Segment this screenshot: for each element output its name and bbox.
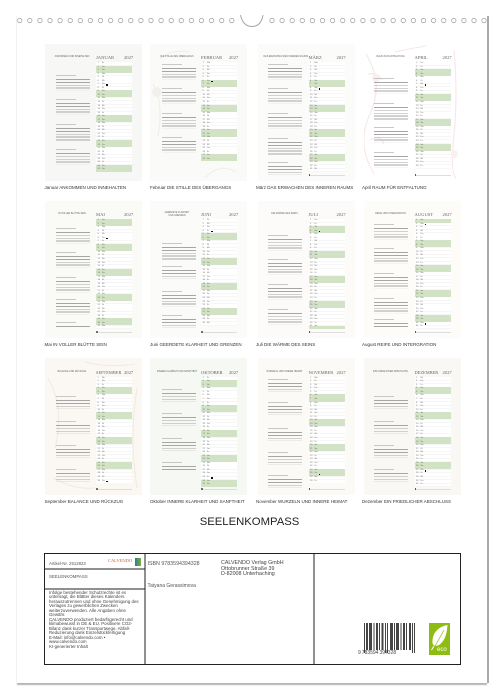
calendar grid: Di Mi Do Fr Sa So Mo Di Mi Do Fr Sa So Mo Di Mi Do Fr Sa So Mo Di Mi Do Fr Sa So Mo Di Mi [207, 219, 210, 324]
calendar grid: Mi Do Fr Sa So Mo Di Mi Do Fr Sa So Mo Di Mi Do Fr Sa So Mo Di Mi Do Fr Sa So Mo Di Mi Do [102, 377, 105, 482]
year: 2027 [229, 55, 238, 60]
calendar grid: Do Fr Sa So Mo Di Mi Do Fr Sa So Mo Di Mi Do Fr Sa So Mo Di Mi Do Fr Sa So Mo Di Mi Do Fr [420, 62, 424, 167]
legal notice: weiterzuverwenden. Alle Angaben ohne [49, 608, 126, 613]
product name: SEELENKOMPASS [49, 574, 88, 579]
heading: Mai: IN VOLLER BLÜTTE SEIN [58, 213, 86, 215]
eco label: eco [437, 647, 447, 653]
calendar grid: Mo Di Mi Do Fr Sa So Mo Di Mi Do Fr Sa So Mo Di Mi Do Fr Sa So Mo Di Mi Do Fr Sa So [207, 62, 210, 160]
heading: November: WURZELN UND INNERE HEIMAT [267, 371, 302, 373]
month name: JUNI [201, 212, 211, 217]
text blocks [268, 379, 302, 488]
year: 2027 [442, 212, 452, 217]
calendar grid [414, 62, 450, 168]
logo wordmark: CALVENDO [108, 558, 132, 563]
panel: März [258, 44, 354, 181]
panel: Juni [150, 201, 247, 338]
calendar grid [96, 377, 132, 483]
panel: Oktober [150, 358, 247, 495]
heading: März: DAS ERWACHEN DES INNEREN RAUMS [264, 56, 308, 58]
legal notice: Infolge bestehender Schutzrechte ist es [49, 590, 126, 595]
imprint table [44, 553, 461, 665]
year: 2027 [442, 370, 452, 374]
spiral binding rings [17, 14, 487, 27]
caption: Dezember: Dezember EIN FRIEDLICHER ABSCHLUSS [362, 499, 451, 504]
legal notice: Gewähr. [49, 612, 65, 617]
calendar grid [308, 219, 344, 329]
text blocks [56, 396, 90, 482]
text blocks [268, 64, 302, 175]
caption: April: April RAUM FÜR ENTFALTUNG [362, 184, 427, 190]
month name: JULI [308, 212, 318, 217]
calendar grid: 1 2 3 4 5 6 7 8 9 10 11 12 13 14 15 16 17 18 19 20 21 22 23 24 25 26 27 28 29 30 31 [416, 377, 418, 485]
legal notice: klimabewusst in DE & EU. Positivere CO2- [49, 621, 132, 626]
caption: Juli: Juli DIE WÄRME DES SEINS [256, 342, 315, 347]
calendar grid: Mo Di Mi Do Fr Sa So Mo Di Mi Do Fr Sa So Mo Di Mi Do Fr Sa So Mo Di Mi Do Fr Sa So Mo Di Mi [314, 62, 318, 170]
calendar grid: 1 2 3 4 5 6 7 8 9 10 11 12 13 14 15 16 17 18 19 20 21 22 23 24 25 26 27 28 [202, 62, 205, 160]
heading: September: BALANCE UND RÜCKZUG [58, 371, 86, 373]
calendar grid: 1 2 3 4 5 6 7 8 9 10 11 12 13 14 15 16 17 18 19 20 21 22 23 24 25 26 27 28 29 30 31 [310, 62, 312, 170]
caption: Mai: Mai IN VOLLER BLÜTTE SEIN [44, 342, 107, 347]
month name: AUGUST [414, 212, 433, 217]
legal notice: Reduzierung dank Einzelstückfertigung [49, 630, 125, 635]
month name: MAI [96, 212, 105, 217]
panel: Juli [258, 201, 354, 338]
calendar grid: Fr Sa So Mo Di Mi Do Fr Sa So Mo Di Mi Do Fr Sa So Mo Di Mi Do Fr Sa So Mo Di Mi Do Fr Sa So [207, 377, 210, 485]
month name: NOVEMBER [308, 370, 333, 374]
year: 2027 [229, 212, 238, 217]
year: 2027 [336, 370, 346, 374]
text blocks [162, 64, 196, 153]
table rules [45, 554, 314, 664]
legal notice: untersagt, die Blätter dieses Kalenders [49, 594, 124, 599]
publisher address [221, 560, 284, 577]
legal notice: CALVENDO produziert bedarfsgerecht und [49, 617, 133, 622]
heading: Dezember: EIN FRIEDLICHER ABSCHLUSS [373, 371, 408, 373]
caption: Juni: Juni GEERDETE KLARHEIT UND GRENZEN [150, 342, 242, 347]
title: SEELENKOMPASS [200, 516, 299, 528]
heading: Februar: DIE STILLE DES ÜBERGANGS [160, 56, 194, 58]
calendar grid: 1 2 3 4 5 6 7 8 9 10 11 12 13 14 15 16 17 18 19 20 21 22 23 24 25 26 27 28 29 30 31 [98, 219, 100, 327]
publisher address: Ottobrunner Straße 39 [221, 566, 274, 572]
text blocks [374, 224, 408, 327]
text blocks [374, 396, 408, 482]
heading: April: RAUM FÜR ENTFALTUNG [376, 56, 405, 58]
month name: JANUAR [96, 55, 114, 60]
month name: FEBRUAR [201, 55, 222, 60]
heading: Juli: DIE WÄRME DES SEINS [271, 213, 298, 215]
panel: Dezember [364, 358, 460, 495]
legal notice: Bilanz dank kurzer Transportwege. Abfall- [49, 626, 130, 631]
legal notice: KI-generierter Inhalt [49, 644, 88, 649]
calendar grid: 1 2 3 4 5 6 7 8 9 10 11 12 13 14 15 16 17 18 19 20 21 22 23 24 25 26 27 28 29 30 31 [202, 377, 205, 485]
barcode [364, 623, 415, 653]
calendar grid [414, 377, 450, 487]
text blocks [162, 243, 196, 328]
calendar grid: 1 2 3 4 5 6 7 8 9 10 11 12 13 14 15 16 17 18 19 20 21 22 23 24 25 26 27 28 29 30 31 [416, 219, 418, 327]
caption: Februar: Februar DIE STILLE DES ÜBERGANGS [150, 184, 231, 190]
month name: SEPTEMBER [96, 370, 121, 374]
calendar grid: Fr Sa So Mo Di Mi Do Fr Sa So Mo Di Mi Do Fr Sa So Mo Di Mi Do Fr Sa So Mo Di Mi Do Fr Sa So [102, 62, 105, 170]
year: 2027 [124, 55, 133, 60]
panel: September [45, 358, 142, 495]
publisher address: CALVENDO Verlag GmbH [221, 560, 284, 566]
year: 2027 [124, 370, 133, 374]
heading: Juni: GEERDETE KLARHEIT [165, 212, 189, 214]
caption: November: November WURZELN UND INNERE HEIMAT [256, 499, 347, 504]
calendar grid [96, 219, 132, 329]
month name: DEZEMBER [414, 370, 438, 374]
calendar grid: 1 2 3 4 5 6 7 8 9 10 11 12 13 14 15 16 17 18 19 20 21 22 23 24 25 26 27 28 29 30 31 [98, 62, 100, 170]
publisher logo [108, 558, 141, 566]
calendar grid [308, 62, 344, 172]
panel: Mai [45, 201, 142, 338]
text blocks [268, 235, 302, 325]
calendar grid [308, 377, 344, 483]
text blocks [162, 389, 196, 470]
calendar grid: Sa So Mo Di Mi Do Fr Sa So Mo Di Mi Do Fr Sa So Mo Di Mi Do Fr Sa So Mo Di Mi Do Fr Sa So Mo [102, 219, 105, 327]
panel: August [364, 201, 460, 338]
calendar grid: 1 2 3 4 5 6 7 8 9 10 11 12 13 14 15 16 17 18 19 20 21 22 23 24 25 26 27 28 29 30 [310, 377, 312, 482]
calendar grid [414, 219, 450, 329]
text blocks [56, 228, 90, 327]
caption: August: August REIFE UND INTERGRATION [362, 342, 436, 347]
calendar grid: So Mo Di Mi Do Fr Sa So Mo Di Mi Do Fr Sa So Mo Di Mi Do Fr Sa So Mo Di Mi Do Fr Sa So Mo Di [420, 219, 424, 327]
calendar grid: Mi Do Fr Sa So Mo Di Mi Do Fr Sa So Mo Di Mi Do Fr Sa So Mo Di Mi Do Fr Sa So Mo Di Mi Do Fr [420, 377, 424, 485]
calendar grid [201, 62, 237, 161]
legal notice: E-Mail: info@calvendo.com • [49, 635, 105, 640]
eco badge [429, 623, 450, 655]
calendar grid: 1 2 3 4 5 6 7 8 9 10 11 12 13 14 15 16 17 18 19 20 21 22 23 24 25 26 27 28 29 30 [98, 377, 100, 482]
year: 2027 [124, 212, 133, 217]
month name: OKTOBER [201, 370, 223, 374]
month name: MÄRZ [308, 55, 322, 60]
heading: Juni [164, 211, 190, 217]
calendar grid [201, 219, 237, 326]
year: 2027 [336, 212, 346, 217]
year: 2027 [336, 55, 346, 60]
leaf icon [431, 625, 448, 650]
calendar grid: Do Fr Sa So Mo Di Mi Do Fr Sa So Mo Di Mi Do Fr Sa So Mo Di Mi Do Fr Sa So Mo Di Mi Do Fr Sa [314, 219, 318, 327]
heading: August: REIFE UND INTERGRATION [375, 213, 406, 215]
calendar grid [201, 377, 237, 487]
caption: Oktober: Oktober INNERE KLARHEIT UND SANFTHEIT [150, 499, 245, 504]
legal notice: Verlages zu gewerblichen Zwecken [49, 603, 118, 608]
panel: Januar [45, 44, 142, 181]
panel: Februar [150, 44, 247, 181]
heading: Januar: ANKOMMEN UND INNEHALTEN [55, 56, 89, 58]
year: 2027 [442, 55, 452, 60]
text blocks [374, 78, 408, 168]
calendar grid: 1 2 3 4 5 6 7 8 9 10 11 12 13 14 15 16 17 18 19 20 21 22 23 24 25 26 27 28 29 30 [416, 62, 418, 167]
heading: Oktober: INNERE KLARHEIT UND SANFTHEIT [157, 371, 197, 373]
author: Tatyana Gerassimova [148, 582, 196, 588]
caption: September: September BALANCE UND RÜCKZUG [44, 499, 123, 504]
calendar grid: 1 2 3 4 5 6 7 8 9 10 11 12 13 14 15 16 17 18 19 20 21 22 23 24 25 26 27 28 29 30 [202, 219, 205, 324]
calendar grid: Mo Di Mi Do Fr Sa So Mo Di Mi Do Fr Sa So Mo Di Mi Do Fr Sa So Mo Di Mi Do Fr Sa So Mo Di [314, 377, 318, 482]
publisher address: D-82008 Unterhaching [221, 571, 275, 577]
month name: APRIL [414, 55, 428, 60]
calendar grid: 1 2 3 4 5 6 7 8 9 10 11 12 13 14 15 16 17 18 19 20 21 22 23 24 25 26 27 28 29 30 31 [310, 219, 312, 327]
logo book mark [135, 558, 140, 566]
year: 2027 [229, 370, 238, 374]
text blocks [56, 75, 90, 165]
legal notice [49, 590, 139, 649]
caption: Januar: Januar ANKOMMEN UND INNEHALTEN [44, 184, 126, 190]
caption: März: März DAS ERWACHEN DES INNEREN RAUMS [256, 184, 353, 190]
legal notice: www.calvendo.com [49, 639, 87, 644]
barcode digits: 9 783594 394328 [358, 650, 396, 656]
panel: April [364, 44, 460, 181]
heading: Juni: UND GRENZEN [168, 215, 186, 217]
panel: November [258, 358, 354, 495]
ISBN: ISBN 9783594394328 [148, 561, 200, 567]
legal notice: herauszutrennen und ohne Genehmigung des [49, 599, 139, 604]
article number: Artikel-Nr. 2512823 [49, 561, 86, 566]
calendar grid [96, 62, 132, 172]
